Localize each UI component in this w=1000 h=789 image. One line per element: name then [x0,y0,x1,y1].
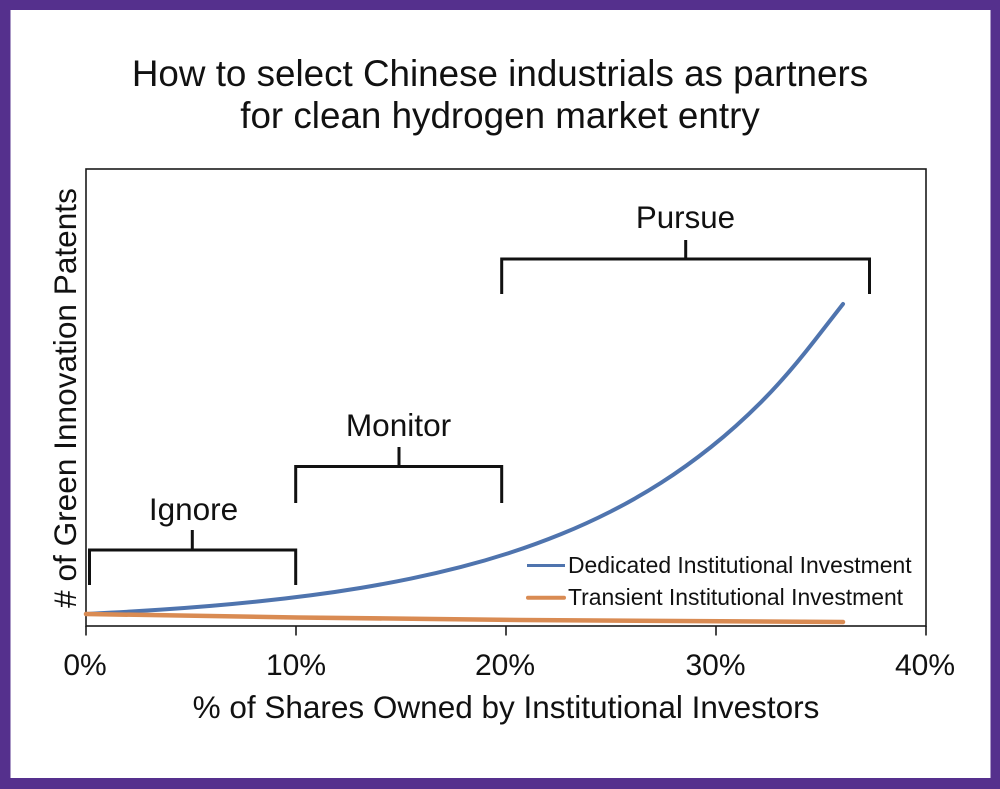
bracket: monitor: Monitor [346,407,451,443]
bracket: ignore: Ignore [149,491,238,527]
dedicated investment curve [86,304,843,614]
chart frame [86,169,926,626]
x axis tick labels: 20% [475,649,535,682]
x axis tick labels: 30% [685,649,746,682]
x axis tick labels: 40% [895,649,955,682]
x axis tick labels: 10% [266,649,326,682]
x axis tick marks [86,626,926,636]
x axis tick labels: 0% [63,649,107,682]
title: for clean hydrogen market entry [240,95,760,136]
x axis label: % of Shares Owned by Institutional Investors [193,689,819,725]
bracket: pursue [502,200,870,294]
legend: Dedicated Institutional Investment [568,552,912,578]
bracket: monitor [296,407,502,503]
title: How to select Chinese industrials as partners [132,53,868,94]
legend: Transient Institutional Investment [568,584,904,610]
y axis label: # of Green Innovation Patents [47,188,83,608]
bracket: ignore [90,491,296,585]
transient investment line [86,614,843,622]
bracket: pursue: Pursue [636,200,735,235]
legend [527,552,912,610]
title [132,53,868,136]
x axis tick labels [63,649,955,682]
